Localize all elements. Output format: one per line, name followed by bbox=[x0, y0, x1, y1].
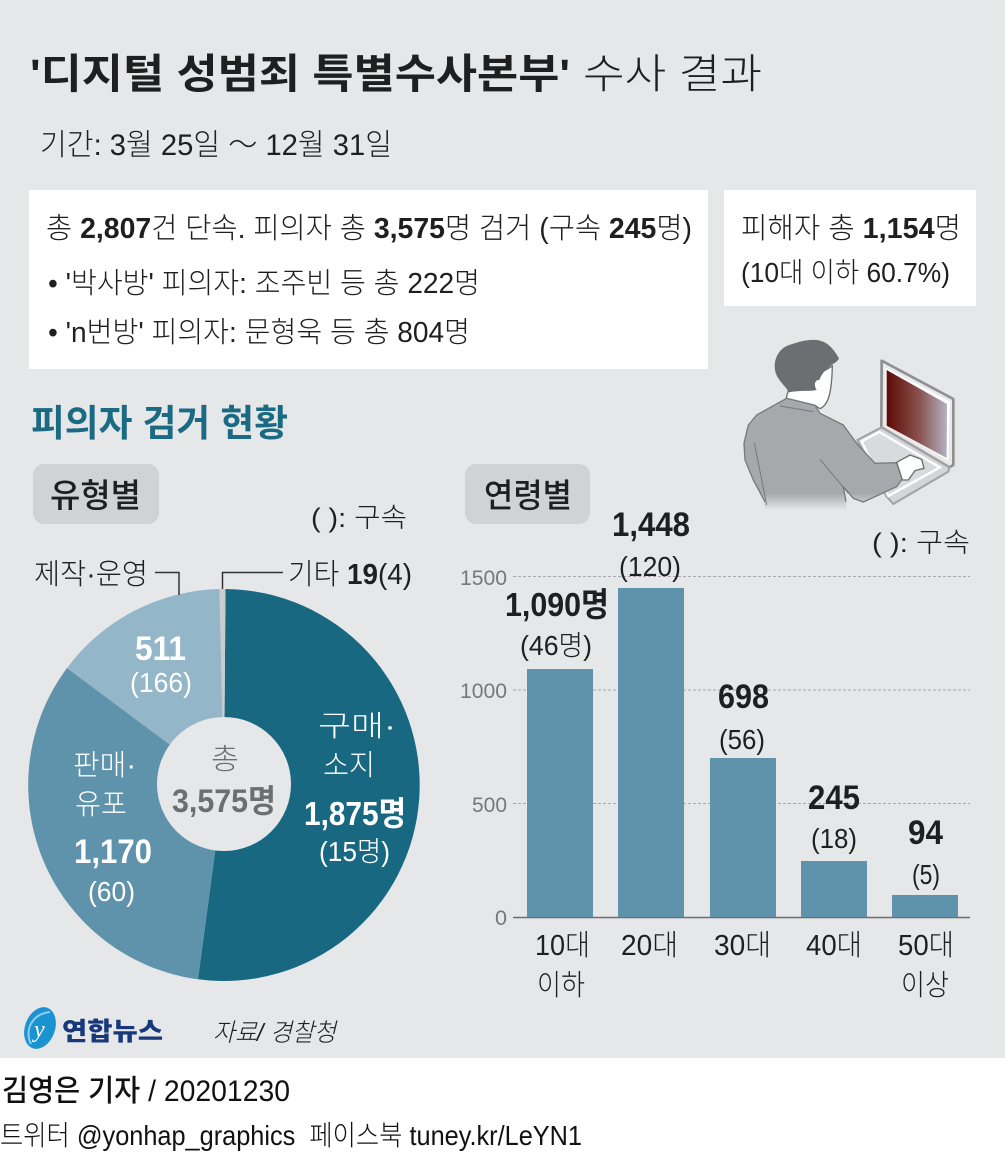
label: other: 기타 19(4) bbox=[288, 559, 412, 591]
label: purchase bbox=[304, 711, 406, 867]
center total: 3,575명 bbox=[172, 783, 276, 819]
bar: 20s: 1,448 bbox=[612, 506, 690, 544]
bar: under 10s: 이하 bbox=[537, 970, 585, 1002]
panel: victims bbox=[724, 190, 976, 306]
label: 511: 511 bbox=[135, 630, 186, 668]
label: purchase: 1,875명 bbox=[304, 795, 406, 832]
source: 자료/ 경찰청 bbox=[213, 1019, 338, 1047]
label: 511: (166) bbox=[130, 667, 192, 698]
bar: 30s: (56) bbox=[719, 724, 765, 755]
bar: 50s and over: (5) bbox=[912, 859, 940, 890]
label pill: by type: 유형별 bbox=[50, 477, 141, 514]
y axis labels: 0 bbox=[495, 907, 507, 930]
bar: 40s: 40대 bbox=[806, 930, 862, 962]
y axis labels: 500 bbox=[472, 794, 507, 817]
label: other bbox=[222, 559, 412, 591]
y axis labels: 1500 bbox=[460, 567, 507, 590]
panel: arrest summary bbox=[29, 190, 708, 369]
label pill: by age: 연령별 bbox=[484, 477, 572, 514]
summary headline: 총 2,807건 단속. 피의자 총 3,575명 검거 (구속 245명) bbox=[46, 213, 692, 245]
bar: 50s and over: 94 bbox=[908, 814, 943, 852]
logo: Yonhap News: 연합뉴스 bbox=[62, 1018, 163, 1046]
credit: social: 트위터 @yonhap_graphics 페이스북 tuney.kr/LeYN1 bbox=[0, 1120, 582, 1151]
title: '디지털 성범죄 특별수사본부' bbox=[30, 51, 570, 97]
bar: under 10s bbox=[505, 586, 609, 1002]
bar: 30s bbox=[710, 678, 776, 962]
label: sale bbox=[73, 750, 152, 907]
label pill: by type bbox=[33, 464, 159, 524]
panel: victims: (10대 이하 60.7%) bbox=[741, 257, 950, 288]
legend: bar detention: ( ): 구속 bbox=[872, 528, 970, 558]
bar: 50s and over: 50대 bbox=[898, 930, 954, 962]
bar: 30s: 698 bbox=[718, 678, 769, 716]
section heading: 피의자 검거 현황 bbox=[31, 403, 288, 444]
credit: reporter: 김영은 기자 / 20201230 bbox=[2, 1075, 290, 1108]
center total bbox=[172, 744, 276, 819]
period text: 기간: 3월 25일 ～ 12월 31일 bbox=[40, 129, 392, 162]
legend: pie detention: ( ): 구속 bbox=[311, 503, 407, 533]
bar: 30s: 30대 bbox=[714, 930, 771, 962]
panel: victims: 피해자 총 1,154명 bbox=[741, 213, 961, 245]
bar: 20s bbox=[612, 506, 690, 962]
bar: 40s: (18) bbox=[811, 823, 857, 854]
center total: 총 bbox=[211, 744, 239, 776]
label pill: by age bbox=[465, 464, 590, 524]
label: sale: 유포 bbox=[75, 789, 127, 821]
bar: 20s: (120) bbox=[619, 551, 681, 582]
bullet: Baksa room: • '박사방' 피의자: 조주빈 등 총 222명 bbox=[48, 268, 480, 300]
label: purchase: (15명) bbox=[319, 836, 390, 867]
logo: Yonhap News: y bbox=[32, 1017, 45, 1043]
bar: 20s: 20대 bbox=[621, 930, 678, 962]
bar: 50s and over: 이상 bbox=[901, 970, 949, 1002]
bar: under 10s: 1,090명 bbox=[505, 586, 609, 623]
bar: under 10s: 10대 bbox=[535, 930, 590, 962]
icon: man at laptop bbox=[744, 340, 953, 510]
bar: 40s bbox=[801, 779, 867, 962]
label: purchase: 소지 bbox=[323, 750, 375, 782]
title: 수사 결과 bbox=[583, 51, 762, 97]
title bbox=[30, 51, 762, 97]
y axis labels: 1000 bbox=[460, 680, 507, 703]
label: production: 제작·운영 bbox=[34, 559, 148, 591]
label: sale: 1,170 bbox=[74, 833, 152, 871]
bullet: n room: • 'n번방' 피의자: 문형욱 등 총 804명 bbox=[48, 317, 470, 349]
y axis labels bbox=[460, 567, 507, 930]
label: sale: (60) bbox=[88, 876, 135, 907]
bar: under 10s: (46명) bbox=[520, 630, 592, 661]
label: purchase: 구매· bbox=[318, 711, 396, 743]
label: 511 bbox=[130, 630, 192, 698]
bar: 50s and over bbox=[892, 814, 958, 1002]
pie chart bbox=[28, 559, 420, 981]
bar: 40s: 245 bbox=[808, 779, 860, 817]
logo: Yonhap News bbox=[19, 1003, 163, 1053]
bar chart bbox=[460, 506, 970, 1002]
label: sale: 판매· bbox=[73, 750, 136, 782]
